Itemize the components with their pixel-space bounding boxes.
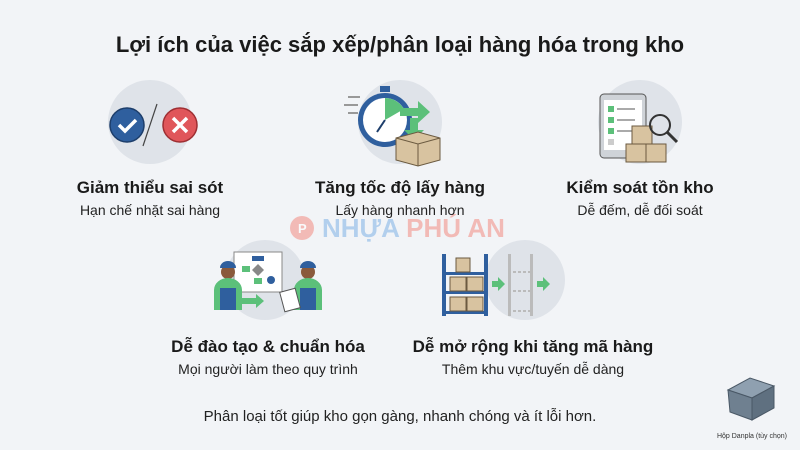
subtitle: Thêm khu vực/tuyến dễ dàng <box>442 361 624 377</box>
subtitle: Hạn chế nhặt sai hàng <box>80 202 220 218</box>
watermark: P <box>298 221 307 236</box>
panel: kiem soat ton kho <box>566 80 714 218</box>
heading: Tăng tốc độ lấy hàng <box>315 178 485 197</box>
title: Lợi ích của việc sắp xếp/phân loại hàng hóa trong kho <box>116 32 684 57</box>
icon: tablet, boxes, magnifier <box>598 80 682 164</box>
icon: workers with flowchart <box>214 240 322 320</box>
subtitle: Dễ đếm, dễ đối soát <box>577 202 703 218</box>
panel: giam thieu sai sot <box>77 80 224 218</box>
footer text: Phân loại tốt giúp kho gọn gàng, nhanh chóng và ít lỗi hơn. <box>204 408 596 425</box>
panel: tang toc do <box>315 80 485 218</box>
icon: stopwatch and box <box>344 80 442 166</box>
icon: danpla box <box>728 378 774 420</box>
heading: Giảm thiểu sai sót <box>77 178 224 197</box>
heading: Kiểm soát tồn kho <box>566 178 714 197</box>
subtitle: Mọi người làm theo quy trình <box>178 361 358 377</box>
icon: check and cross <box>108 80 197 164</box>
panel: dao tao <box>171 240 365 377</box>
subtitle: Lấy hàng nhanh hơn <box>335 202 465 218</box>
icon: shelves with arrows <box>442 240 565 320</box>
heading: Dễ mở rộng khi tăng mã hàng <box>413 337 653 356</box>
caption: Hộp Danpla (tùy chọn) <box>717 433 787 440</box>
heading: Dễ đào tạo & chuẩn hóa <box>171 337 365 356</box>
watermark: NHỰA PHÚ AN <box>322 213 505 243</box>
panel: mo rong <box>413 240 653 377</box>
